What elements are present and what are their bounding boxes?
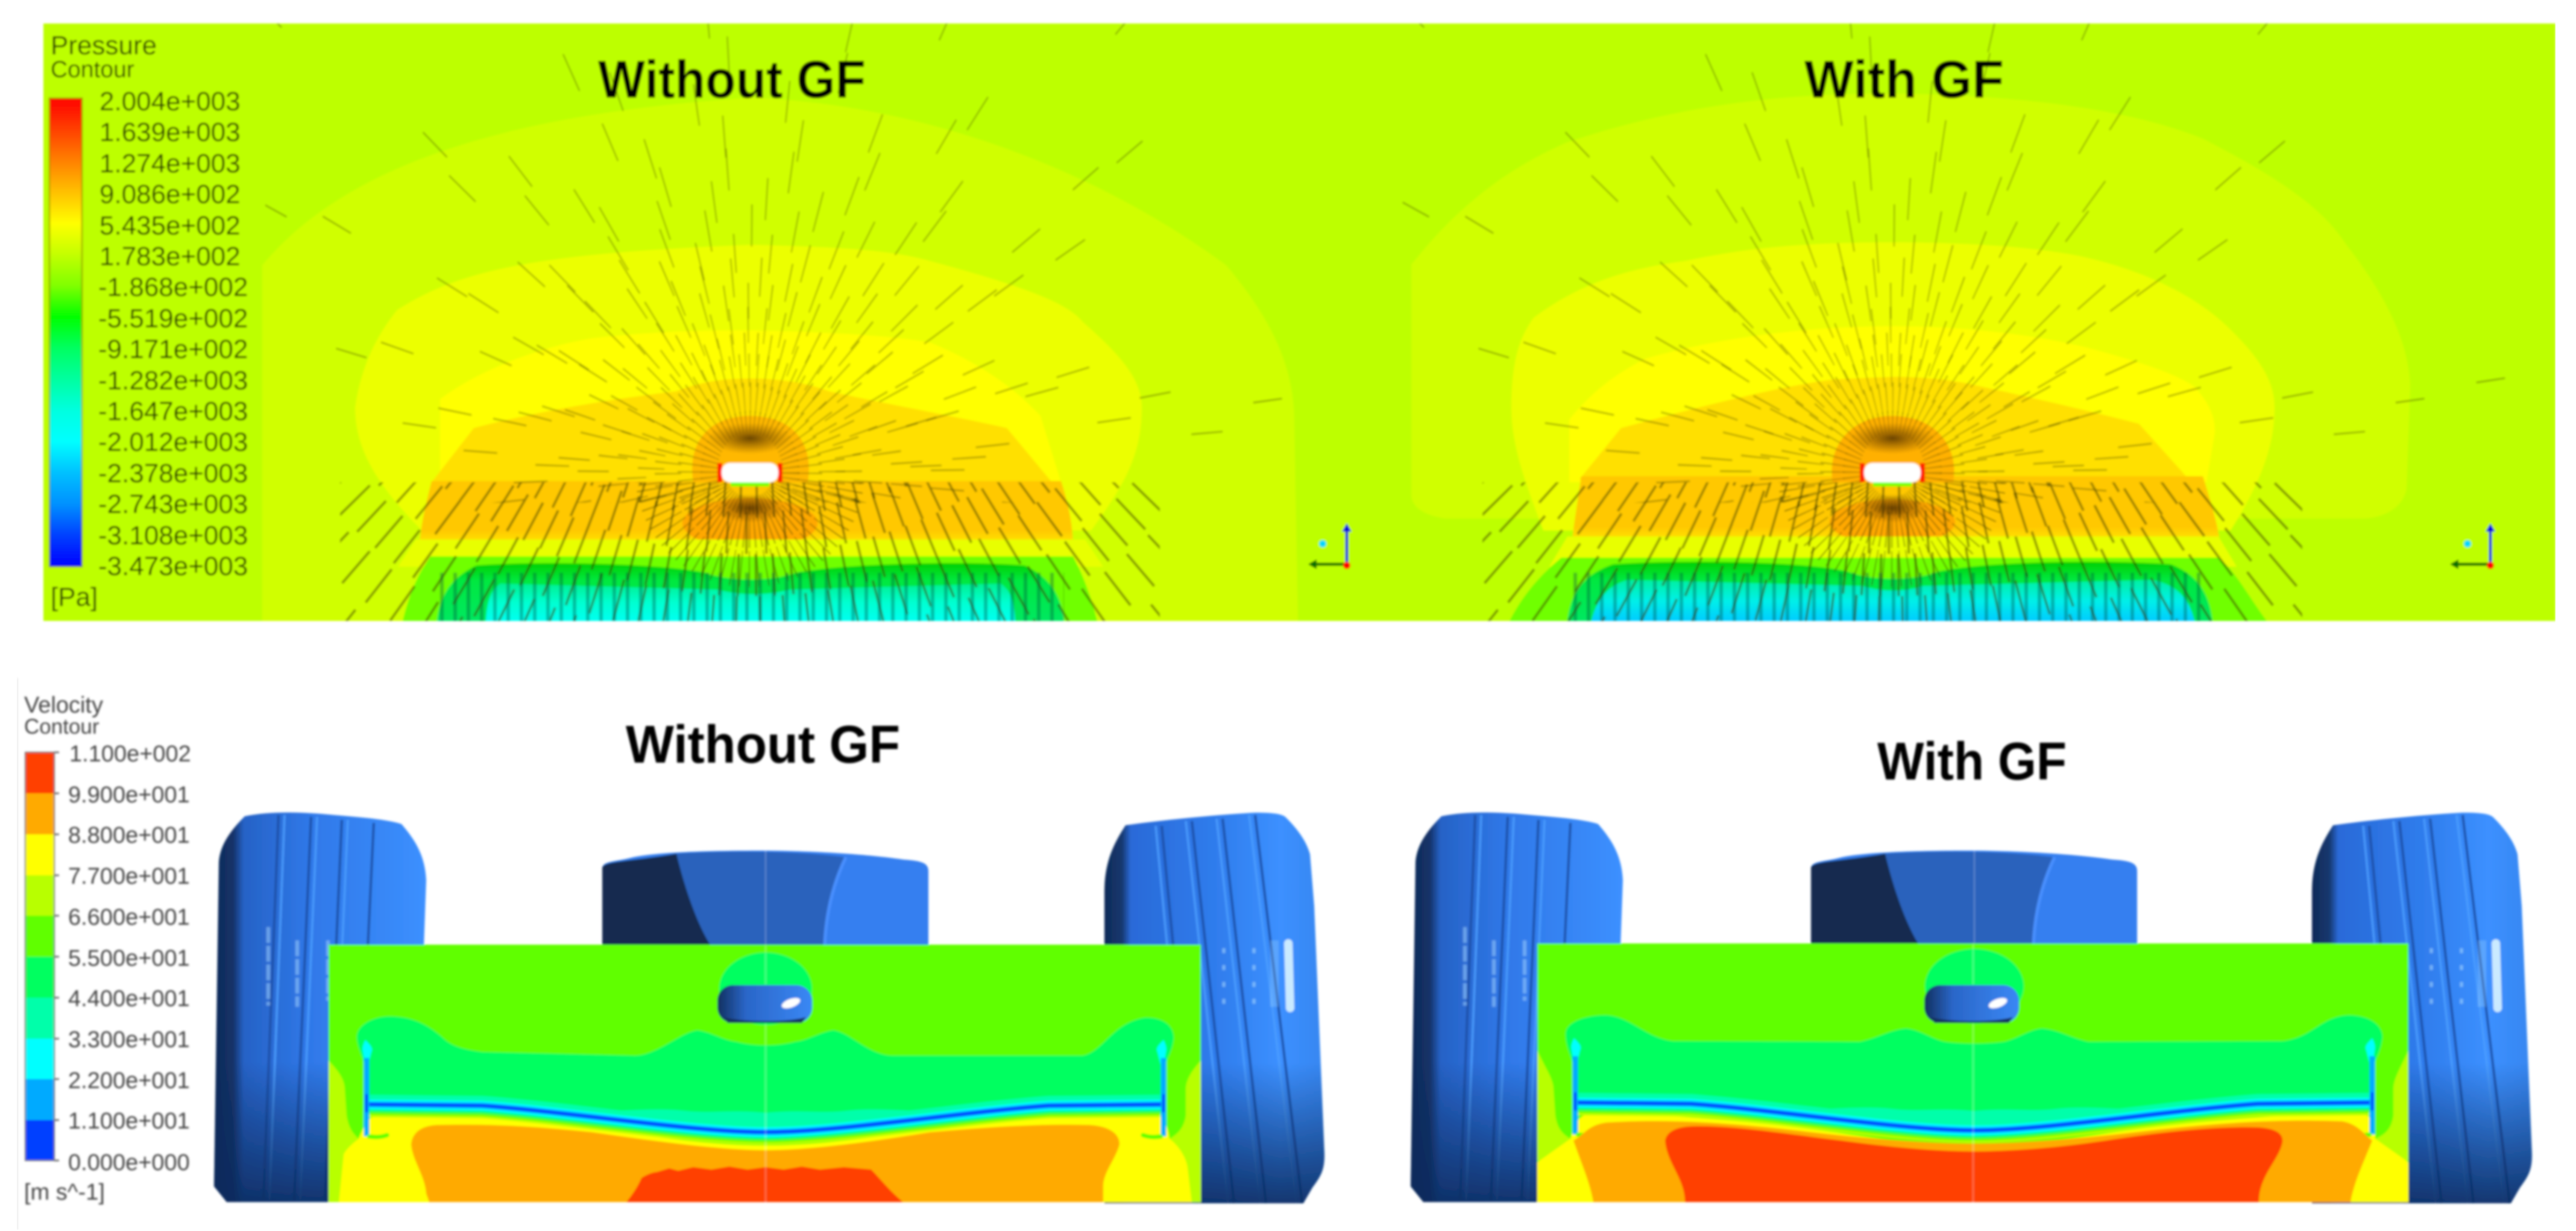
velocity section plane <box>329 945 1201 1202</box>
legend values: 2.004e+003 <box>99 87 241 116</box>
legend values: 3.300e+001 <box>68 1027 190 1053</box>
heading: with GF top: With GF <box>1804 49 2004 109</box>
legend values: 2.200e+001 <box>68 1068 190 1094</box>
legend values: -1.868e+002 <box>98 272 248 302</box>
legend values: 8.800e+001 <box>68 823 190 848</box>
legend values: 7.700e+001 <box>68 864 190 889</box>
legend values: -3.473e+003 <box>98 552 248 581</box>
legend values <box>98 87 248 581</box>
legend values: 0.000e+000 <box>68 1150 190 1176</box>
legend values: 5.435e+002 <box>99 211 241 241</box>
vehicle cross-section: with GF <box>1860 463 1925 486</box>
legend values: -1.282e+003 <box>98 366 248 395</box>
vehicle body <box>602 851 928 945</box>
heading: with GF bottom: With GF <box>1877 731 2067 791</box>
heading: without GF bottom: Without GF <box>626 714 900 774</box>
legend values: 9.900e+001 <box>68 782 190 808</box>
small body <box>717 985 812 1023</box>
legend values: 9.086e+002 <box>99 180 241 209</box>
legend values: -5.519e+002 <box>98 304 248 333</box>
panel: velocity contours with GF <box>1411 813 2532 1203</box>
legend title: Contour <box>51 57 134 83</box>
velocity section plane <box>1537 943 2408 1202</box>
icon: axis triad left <box>1308 523 1352 569</box>
legend values: -9.171e+002 <box>98 335 248 364</box>
legend values: -2.378e+003 <box>98 459 248 488</box>
legend colour bar <box>25 752 59 1160</box>
legend values <box>68 741 191 1176</box>
legend title: Contour <box>24 715 99 738</box>
legend values: 1.639e+003 <box>99 118 241 147</box>
rear tyre left <box>214 813 426 1202</box>
legend unit: [m s^-1] <box>24 1180 105 1205</box>
legend unit: [Pa] <box>51 582 98 612</box>
legend values: 4.400e+001 <box>68 986 190 1012</box>
legend values: 6.600e+001 <box>68 905 190 930</box>
heading: without GF top: Without GF <box>598 49 866 109</box>
small body <box>1924 985 2019 1023</box>
rear tyre left <box>1411 813 1623 1202</box>
legend colour bar <box>49 98 82 567</box>
legend values: 1.274e+003 <box>99 149 241 178</box>
rear tyre right <box>2312 813 2532 1203</box>
legend values: 5.500e+001 <box>68 946 190 971</box>
legend title: Velocity <box>24 693 103 718</box>
panel: velocity contours without GF <box>214 813 1324 1203</box>
legend values: -2.012e+003 <box>98 427 248 457</box>
vehicle body <box>1811 851 2137 945</box>
legend values: 1.783e+002 <box>99 242 241 271</box>
vector arrows: with GF <box>1235 0 2549 1226</box>
legend values: -1.647e+003 <box>98 397 248 426</box>
legend values: -2.743e+003 <box>98 490 248 519</box>
legend title: Pressure <box>51 31 157 60</box>
pressure legend <box>49 31 248 612</box>
rear tyre right <box>1104 813 1324 1203</box>
legend values: 1.100e+002 <box>69 741 191 767</box>
contour field: without GF <box>262 98 1298 621</box>
contour field: with GF <box>1411 93 2410 621</box>
velocity legend <box>17 678 191 1230</box>
icon: axis triad right <box>2450 523 2495 569</box>
vehicle cross-section: without GF <box>717 463 783 486</box>
vector arrows: without GF <box>84 23 2491 622</box>
legend values: -3.108e+003 <box>98 521 248 550</box>
panel: pressure contours <box>42 22 2556 623</box>
legend values: 1.100e+001 <box>68 1109 190 1134</box>
